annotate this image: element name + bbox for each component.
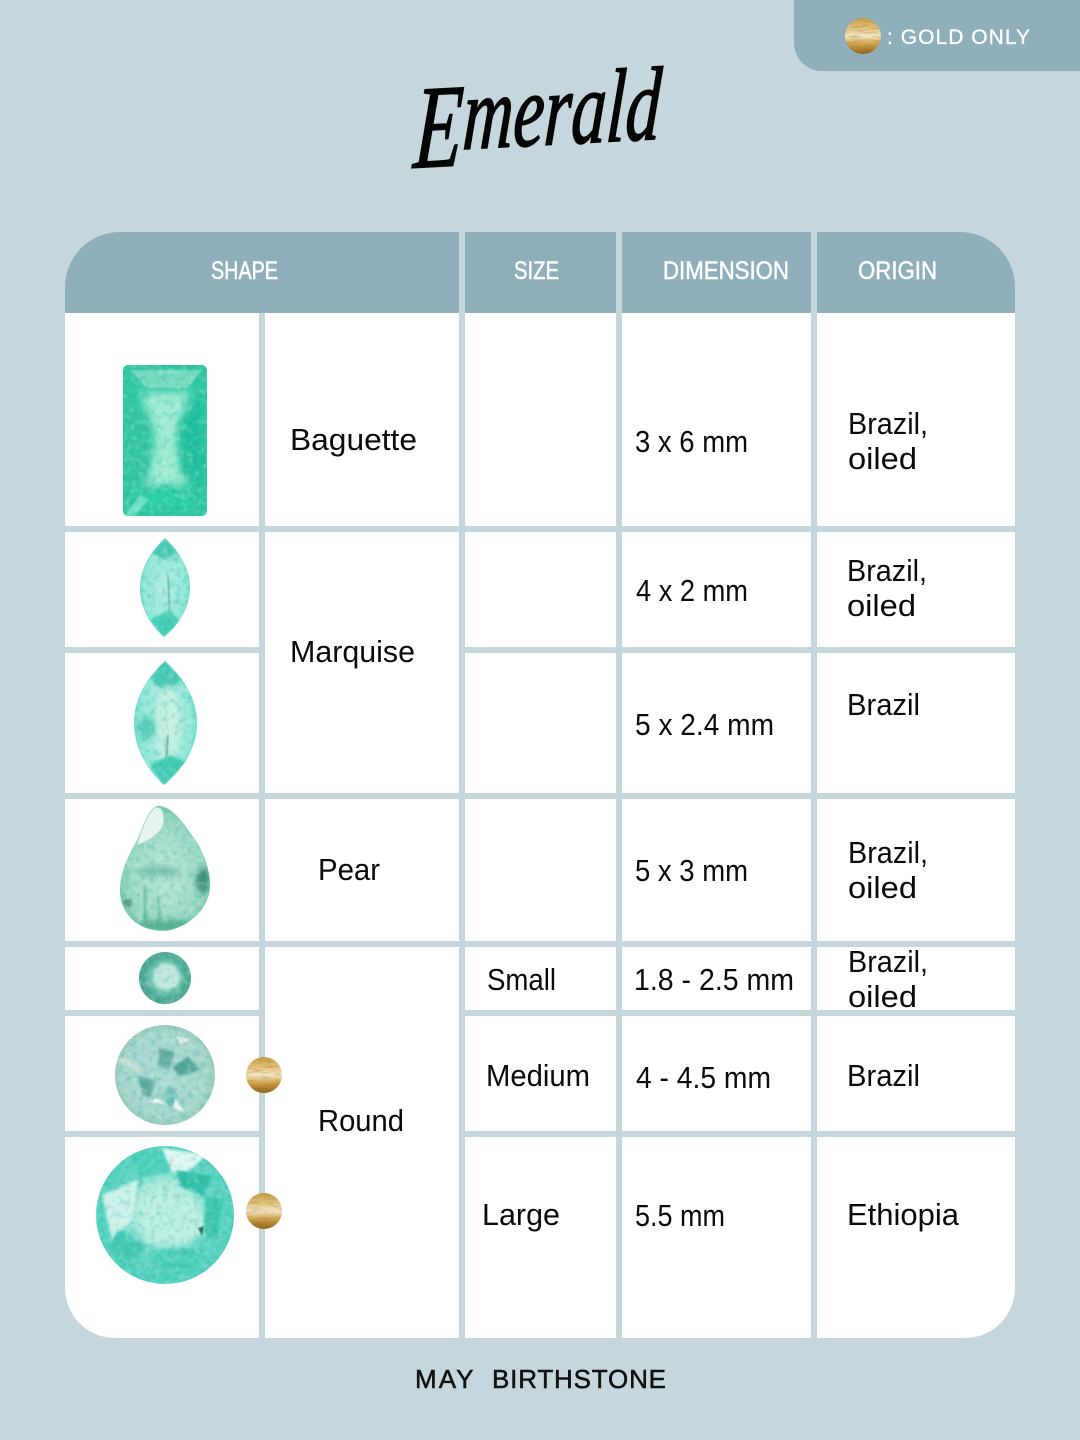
- header: shape: SHAPE: [211, 257, 278, 285]
- icon: gold dot legend: [845, 18, 881, 54]
- origin labels: [847, 406, 960, 1232]
- gem: medium round: [115, 1025, 215, 1125]
- dimension labels: 5.5 mm: [635, 1198, 725, 1233]
- dimension labels: 4 x 2 mm: [636, 573, 748, 608]
- legend label: : GOLD ONLY: [887, 26, 1030, 49]
- icon: gold dot, large round: [246, 1193, 282, 1229]
- origin labels: oiled: [848, 979, 917, 1014]
- origin labels: oiled: [848, 870, 917, 905]
- gem: pear top highlight: [137, 808, 164, 845]
- origin labels: Ethiopia: [847, 1197, 960, 1232]
- origin labels: Brazil,: [847, 553, 927, 588]
- gem: small marquise: [140, 538, 190, 637]
- shape labels: Pear: [318, 852, 380, 887]
- header: origin: ORIGIN: [858, 257, 937, 285]
- dimension labels: 3 x 6 mm: [635, 424, 748, 459]
- size labels: Large: [482, 1197, 560, 1232]
- gem: large round: [96, 1146, 234, 1284]
- origin labels: Brazil,: [848, 944, 928, 979]
- shape labels: Round: [318, 1103, 404, 1138]
- title: [410, 46, 665, 194]
- header: dimension: DIMENSION: [663, 257, 789, 285]
- footer: may birthstone: MAY: [415, 1364, 473, 1394]
- origin labels: Brazil,: [848, 406, 928, 441]
- footer: may birthstone: BIRTHSTONE: [492, 1364, 666, 1394]
- gem: pear emerald: [120, 806, 210, 931]
- size labels: Medium: [486, 1058, 590, 1093]
- table: header band: [65, 232, 1015, 313]
- shape labels: [290, 422, 417, 1138]
- table: white body: [65, 313, 1015, 1338]
- shape labels: Baguette: [290, 422, 417, 457]
- shape labels: Marquise: [290, 634, 415, 669]
- origin labels: oiled: [847, 588, 916, 623]
- dimension labels: 5 x 2.4 mm: [635, 707, 774, 742]
- dimension labels: 5 x 3 mm: [635, 853, 748, 888]
- origin labels: Brazil: [847, 687, 920, 722]
- dimension labels: 1.8 - 2.5 mm: [634, 962, 794, 997]
- origin labels: Brazil: [847, 1058, 920, 1093]
- gem: baguette emerald: [123, 365, 207, 516]
- origin labels: oiled: [848, 441, 917, 476]
- dimension labels: [634, 424, 794, 1233]
- header: size: SIZE: [514, 257, 559, 285]
- gem: large marquise: [134, 661, 197, 785]
- size labels: [482, 962, 590, 1232]
- legend: gold only tab: [794, 0, 1080, 71]
- dimension labels: 4 - 4.5 mm: [636, 1060, 771, 1095]
- size labels: Small: [487, 962, 556, 997]
- icon: gold dot, medium round: [246, 1057, 282, 1093]
- title: merald: [461, 46, 665, 172]
- origin labels: Brazil,: [848, 835, 928, 870]
- gem: small round: [139, 952, 191, 1004]
- title: E: [410, 60, 466, 194]
